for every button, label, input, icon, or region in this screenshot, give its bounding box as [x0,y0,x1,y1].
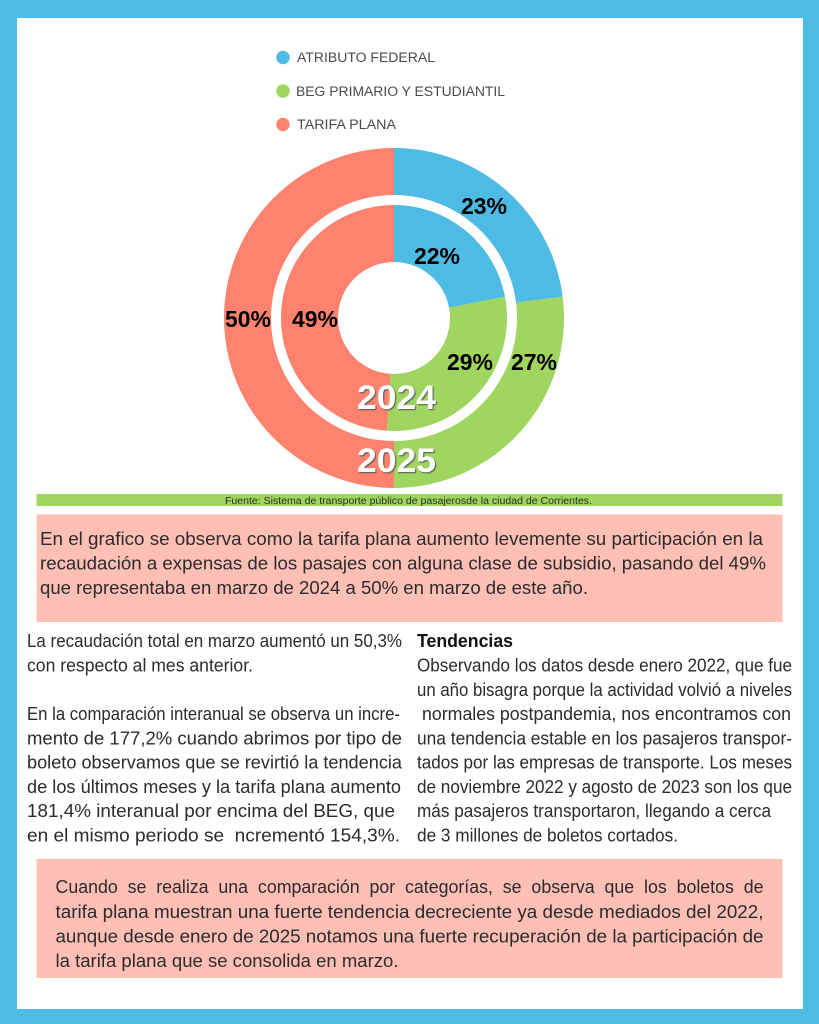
source bar: Fuente: Sistema de transporte público de pasajerosde la ciudad de Corrientes. [225,496,592,507]
text block: left column: boleto observamos que se revirtió la tendencia [27,752,403,772]
callout: bottom summary: Cuando se realiza una comparación por categorías, se observa que los boletos de [56,877,764,897]
callout: top summary [36,514,782,622]
text block: tendencias: una tendencia estable en los pasajeros transpor- [417,728,792,748]
value labels: 29% [447,349,493,375]
legend item: atributo federal: ATRIBUTO FEDERAL [297,50,436,65]
heading: tendencias: Tendencias [417,631,513,651]
callout: top summary: recaudación a expensas de los pasajes con alguna clase de subsidio, pasando del 49% [40,554,766,574]
text block: tendencias: de noviembre 2022 y agosto de 2023 son los que [417,777,792,797]
source bar [36,494,782,507]
callout: bottom summary: aunque desde enero de 2025 notamos una fuerte recuperación de la participación de [56,926,764,946]
year labels: 2024 [357,379,436,417]
text block: left column: En la comparación interanual se observa un incre- [27,704,400,724]
legend [276,50,506,132]
text block: tendencias: normales postpandemia, nos encontramos con [422,704,791,724]
text block: tendencias: un año bisagra porque la actividad volvió a niveles [417,680,792,700]
text block: tendencias: más pasajeros transportaron, llegando a cerca [417,801,772,821]
text block: tendencias: Observando los datos desde enero 2022, que fue [417,656,792,676]
year labels: 2025 [357,442,436,480]
value labels: 27% [511,349,557,375]
text block: tendencias [417,631,792,846]
text block: left column: con respecto al mes anterior. [27,656,253,676]
value labels [225,193,557,375]
legend item: beg primario y estudiantil: BEG PRIMARIO Y ESTUDIANTIL [296,84,506,99]
callout: bottom summary: la tarifa plana que se consolida en marzo. [56,951,398,971]
value labels: 23% [461,193,507,219]
value labels: 22% [414,243,460,269]
callout: top summary: que representaba en marzo de 2024 a 50% en marzo de este año. [40,578,588,598]
inner ring 2024 [281,205,507,431]
callout: top summary: En el grafico se observa como la tarifa plana aumento levemente su participación en la [40,529,764,549]
outer ring 2025 [224,148,564,488]
text block: left column: mento de 177,2% cuando abrimos por tipo de [27,728,402,748]
legend item: tarifa plana: TARIFA PLANA [297,117,396,132]
text block: tendencias: de 3 millones de boletos cortados. [417,826,678,846]
value labels: 49% [292,306,338,332]
text block: left column: La recaudación total en marzo aumentó un 50,3% [27,631,402,651]
text block: left column: de los últimos meses y la tarifa plana aumento [27,777,401,797]
year labels [357,379,436,480]
callout: bottom summary: tarifa plana muestran una fuerte tendencia decreciente ya desde mediados del 2022, [56,902,764,922]
text block: left column: 181,4% interanual por encima del BEG, que [27,801,395,821]
chart: nested donut 2024 and 2025 [224,148,564,488]
text block: tendencias: tados por las empresas de transporte. Los meses [417,752,792,772]
text block: left column [27,631,403,846]
value labels: 50% [225,306,271,332]
text block: left column: en el mismo periodo se ncrementó 154,3%. [27,826,400,846]
callout: bottom summary [36,859,782,978]
